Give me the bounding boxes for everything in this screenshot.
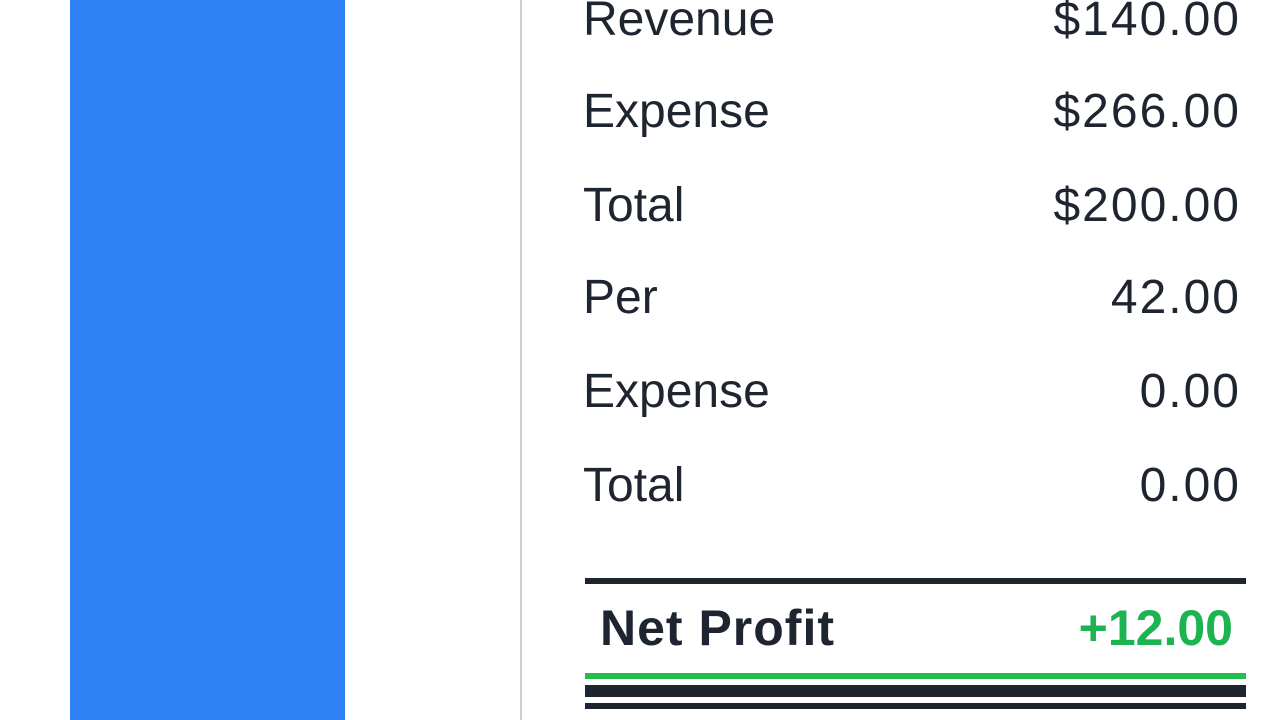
net profit row: Net Profit	[600, 600, 835, 656]
row: per: 42.00	[1111, 271, 1241, 324]
row: per	[583, 271, 1241, 324]
row: total	[583, 179, 1241, 232]
row: revenue	[583, 0, 1241, 46]
row: expense	[583, 85, 1241, 138]
row: total 2: 0.00	[1140, 459, 1241, 512]
row: expense 2	[583, 365, 1241, 418]
net profit row: +12.00	[1079, 600, 1233, 656]
top rule	[585, 578, 1246, 584]
row: total 2: Total	[583, 459, 684, 512]
row: expense 2: Expense	[583, 365, 770, 418]
net profit row	[600, 600, 1233, 656]
dark double rules	[585, 685, 1246, 697]
row: expense: $266.00	[1053, 85, 1241, 138]
row: total 2	[583, 459, 1241, 512]
row: expense 2: 0.00	[1140, 365, 1241, 418]
row: expense: Expense	[583, 85, 770, 138]
blue bar	[70, 0, 345, 720]
green rule	[585, 673, 1246, 679]
vertical divider	[520, 0, 522, 720]
row: total: $200.00	[1053, 179, 1241, 232]
row: per: Per	[583, 271, 658, 324]
row: total: Total	[583, 179, 684, 232]
